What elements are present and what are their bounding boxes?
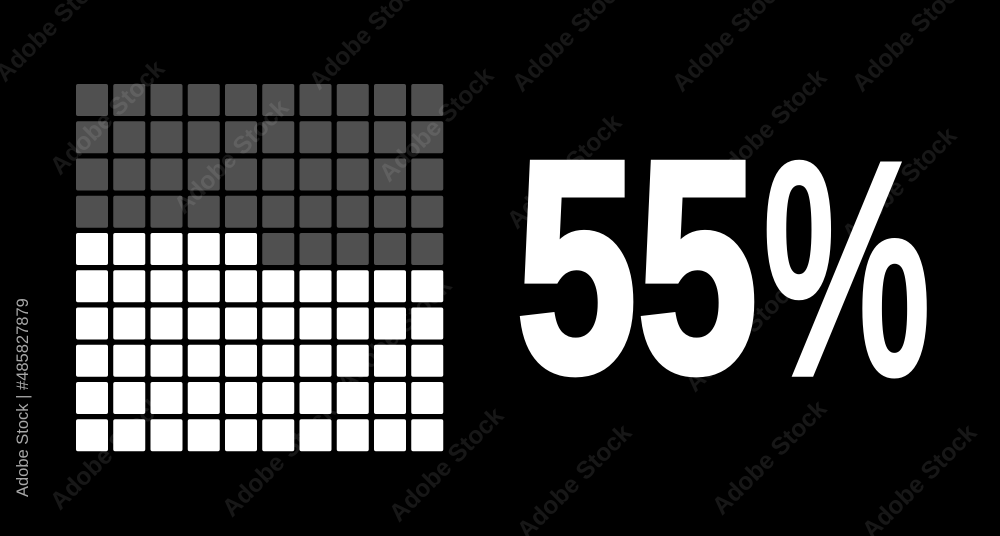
stock image id, vertical: Adobe Stock | #485827879	[14, 298, 32, 497]
watermarks: Adobe Stock	[374, 62, 499, 187]
watermarks: Adobe Stock	[169, 94, 294, 219]
watermarks: Adobe Stock	[45, 55, 170, 180]
waffle chart: 55 of 100 squares filled	[76, 84, 443, 451]
watermarks: Adobe Stock	[707, 64, 832, 189]
watermarks: Adobe Stock	[502, 109, 627, 234]
filled squares	[76, 233, 443, 451]
watermarks: Adobe Stock	[680, 272, 805, 397]
digits 55: 55	[516, 98, 758, 435]
watermarks: Adobe Stock	[837, 122, 962, 247]
unfilled squares	[76, 84, 443, 265]
watermarks: Adobe Stock	[332, 272, 457, 397]
watermarks: Adobe Stock	[217, 397, 342, 522]
percent sign: %	[763, 102, 930, 435]
watermarks: Adobe Stock	[45, 390, 170, 515]
watermarks: Adobe Stock	[707, 395, 832, 520]
big percentage value	[516, 98, 930, 435]
watermarks: Adobe Stock	[384, 402, 509, 527]
